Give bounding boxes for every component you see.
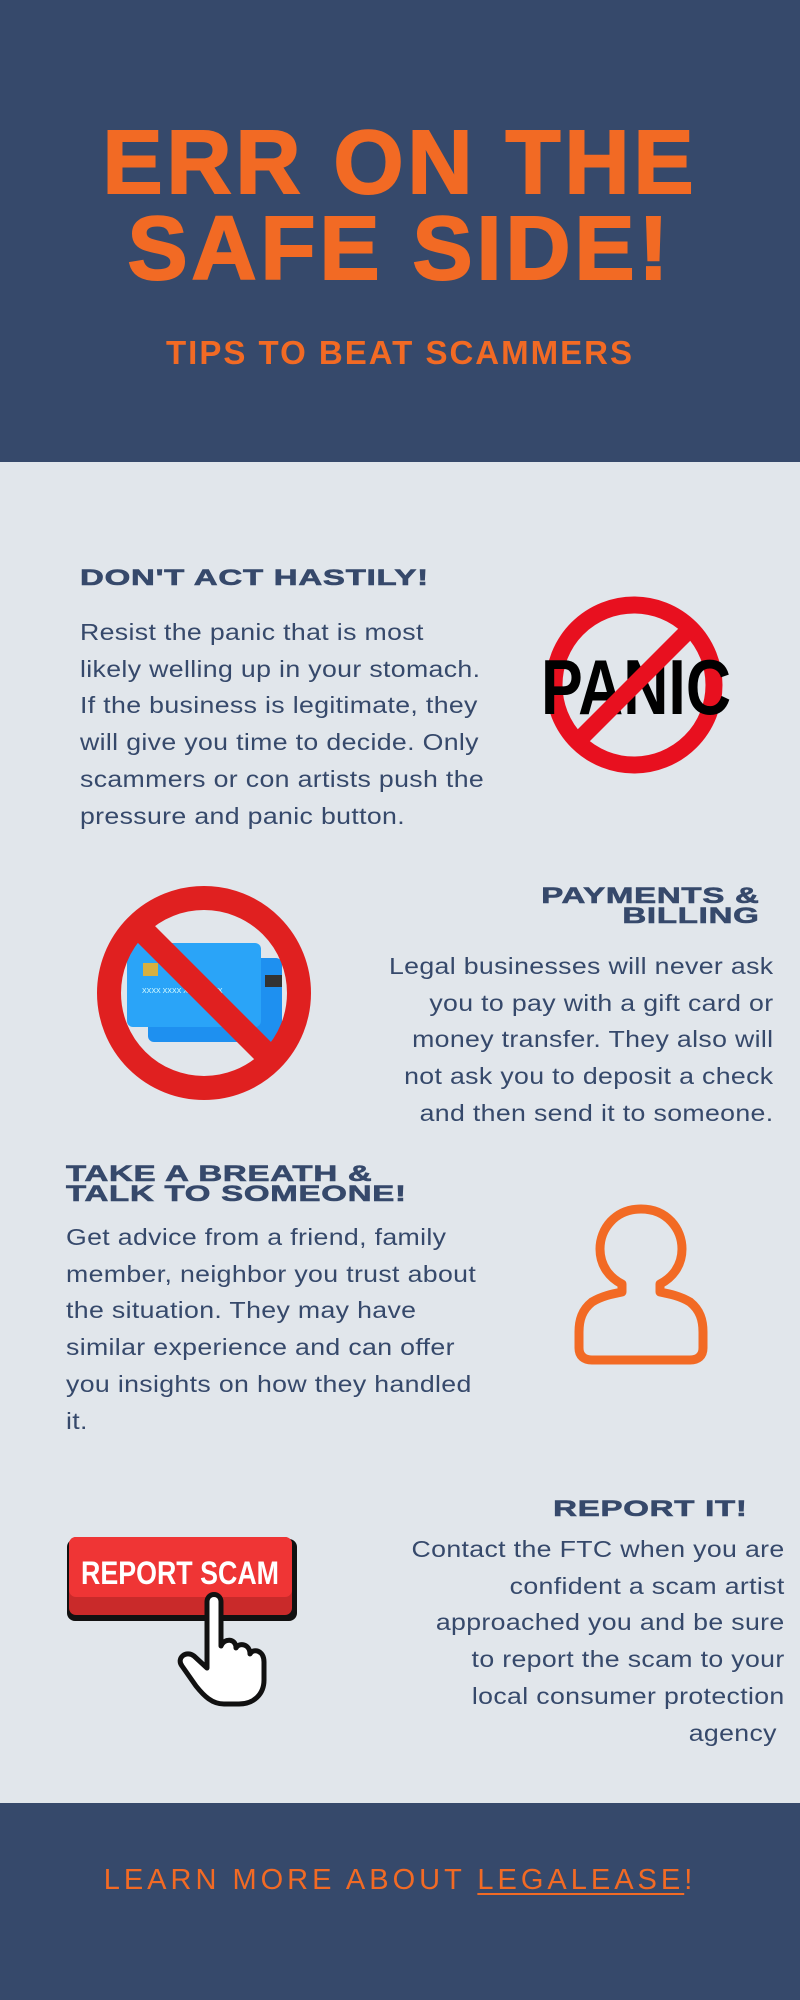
body text: and then send it to someone. (419, 1100, 773, 1126)
title: SAFE SIDE! (127, 199, 673, 299)
heading: TAKE A BREATH & (66, 1161, 372, 1186)
icon: report scam button (67, 1537, 297, 1706)
body text: likely welling up in your stomach. (80, 656, 480, 682)
heading (542, 883, 760, 928)
header panel (0, 0, 800, 462)
body text: you insights on how they handled (66, 1371, 472, 1397)
heading: REPORT IT! (553, 1496, 748, 1521)
body text: confident a scam artist (510, 1573, 785, 1599)
section 3: take a breath (66, 1161, 476, 1434)
footer link text: LEARN MORE ABOUT LEGALEASE! (104, 1864, 696, 1896)
body text: Get advice from a friend, family (66, 1224, 446, 1250)
body text (66, 1224, 476, 1434)
heading: BILLING (623, 903, 760, 928)
section 1: don't act hastily (80, 565, 484, 829)
body text: the situation. They may have (66, 1297, 416, 1323)
subtitle: TIPS TO BEAT SCAMMERS (166, 334, 634, 371)
body text: pressure and panic button. (80, 803, 405, 829)
body text: agency (689, 1720, 777, 1746)
icon: no credit card: XXXX XXXX XXXX XXXX (142, 988, 223, 995)
section 4: report it (412, 1496, 785, 1746)
heading: TALK TO SOMEONE! (66, 1181, 407, 1206)
body text: it. (66, 1408, 88, 1434)
body text: not ask you to deposit a check (404, 1063, 773, 1089)
body text: scammers or con artists push the (80, 766, 484, 792)
body text: money transfer. They also will (412, 1026, 773, 1052)
icon: person (574, 1204, 708, 1364)
body text: local consumer protection (472, 1683, 785, 1709)
body text: you to pay with a gift card or (429, 990, 773, 1016)
body text: to report the scam to your (472, 1646, 785, 1672)
title: ERR ON THE (102, 113, 698, 213)
body text: Resist the panic that is most (80, 619, 424, 645)
body text (388, 953, 773, 1126)
heading (66, 1161, 407, 1206)
section 2: payments & billing (388, 883, 773, 1126)
body text (80, 619, 484, 829)
title (102, 113, 698, 299)
body text: Contact the FTC when you are (412, 1536, 785, 1562)
icon: no credit card (97, 886, 311, 1100)
body text: Legal businesses will never ask (388, 953, 773, 979)
icon: no panic (541, 596, 731, 774)
heading: PAYMENTS & (542, 883, 760, 908)
heading: DON'T ACT HASTILY! (80, 565, 429, 590)
body text: If the business is legitimate, they (80, 692, 478, 718)
body text: similar experience and can offer (66, 1334, 455, 1360)
body text: approached you and be sure (436, 1609, 785, 1635)
body text: member, neighbor you trust about (66, 1261, 476, 1287)
body text (412, 1536, 785, 1746)
body text: will give you time to decide. Only (80, 729, 479, 755)
footer panel (0, 1803, 800, 2000)
